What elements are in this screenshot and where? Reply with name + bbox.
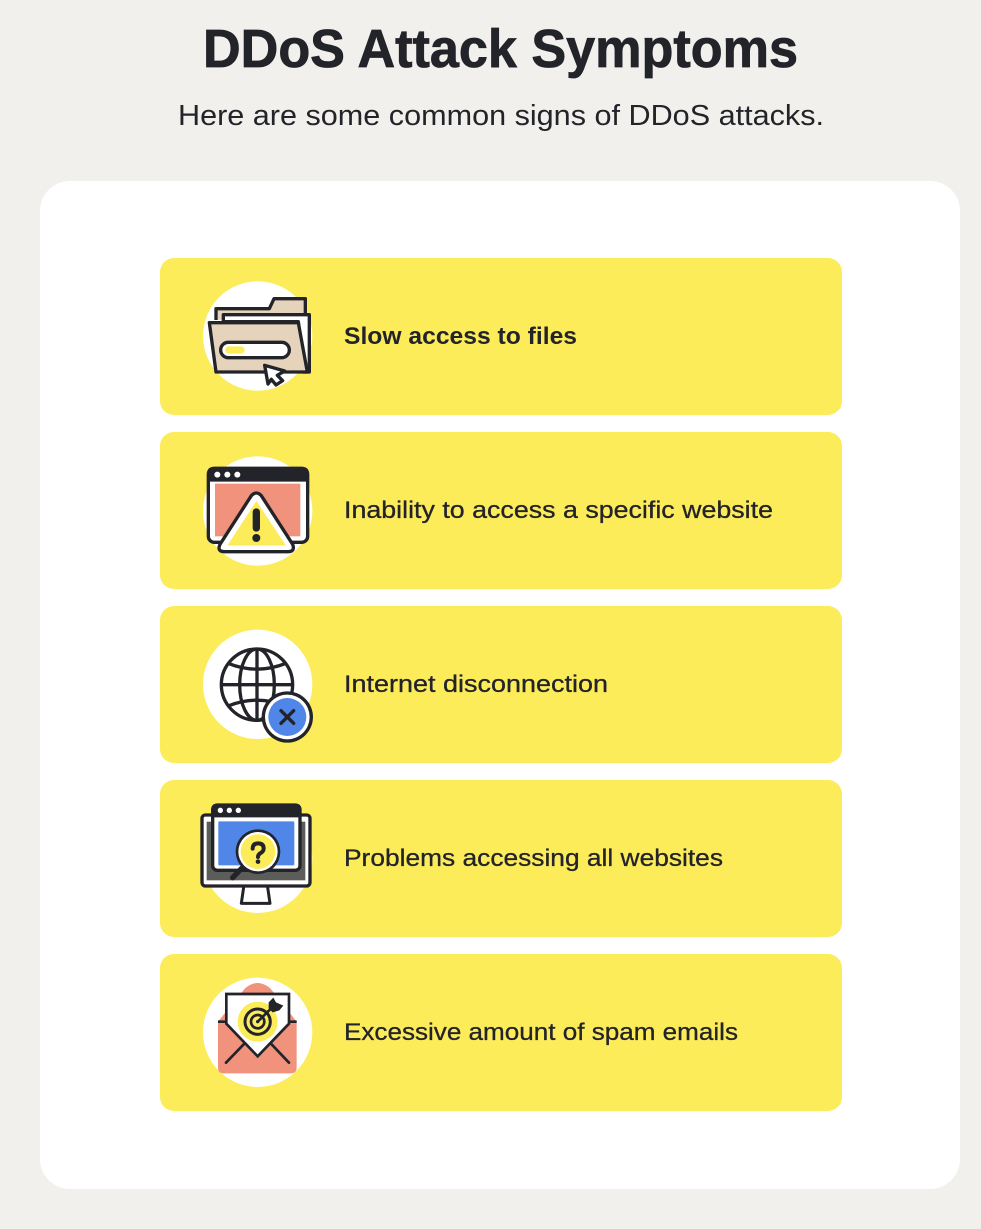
icon: open envelope with target (203, 978, 312, 1087)
panel: problems accessing all websites (160, 780, 842, 937)
label: Slow access to files (344, 323, 577, 350)
icon: browser window with warning triangle (203, 456, 312, 566)
label: Problems accessing all websites (344, 845, 723, 872)
label: Internet disconnection (344, 671, 608, 698)
icon: monitor with magnifier (202, 804, 312, 913)
panel: symptoms card (40, 181, 960, 1189)
subtitle: Here are some common signs of DDoS attacks. (178, 100, 824, 132)
panel: excessive amount of spam emails (160, 954, 842, 1111)
icon: globe with X badge (203, 630, 313, 743)
icon: folder with progress bar (203, 281, 312, 391)
panel: slow access to files (160, 258, 842, 415)
label: Excessive amount of spam emails (344, 1019, 738, 1046)
title: DDoS Attack Symptoms (203, 19, 798, 79)
label: Inability to access a specific website (344, 497, 773, 524)
panel: inability to access a specific website (160, 432, 842, 589)
panel: internet disconnection (160, 606, 842, 763)
